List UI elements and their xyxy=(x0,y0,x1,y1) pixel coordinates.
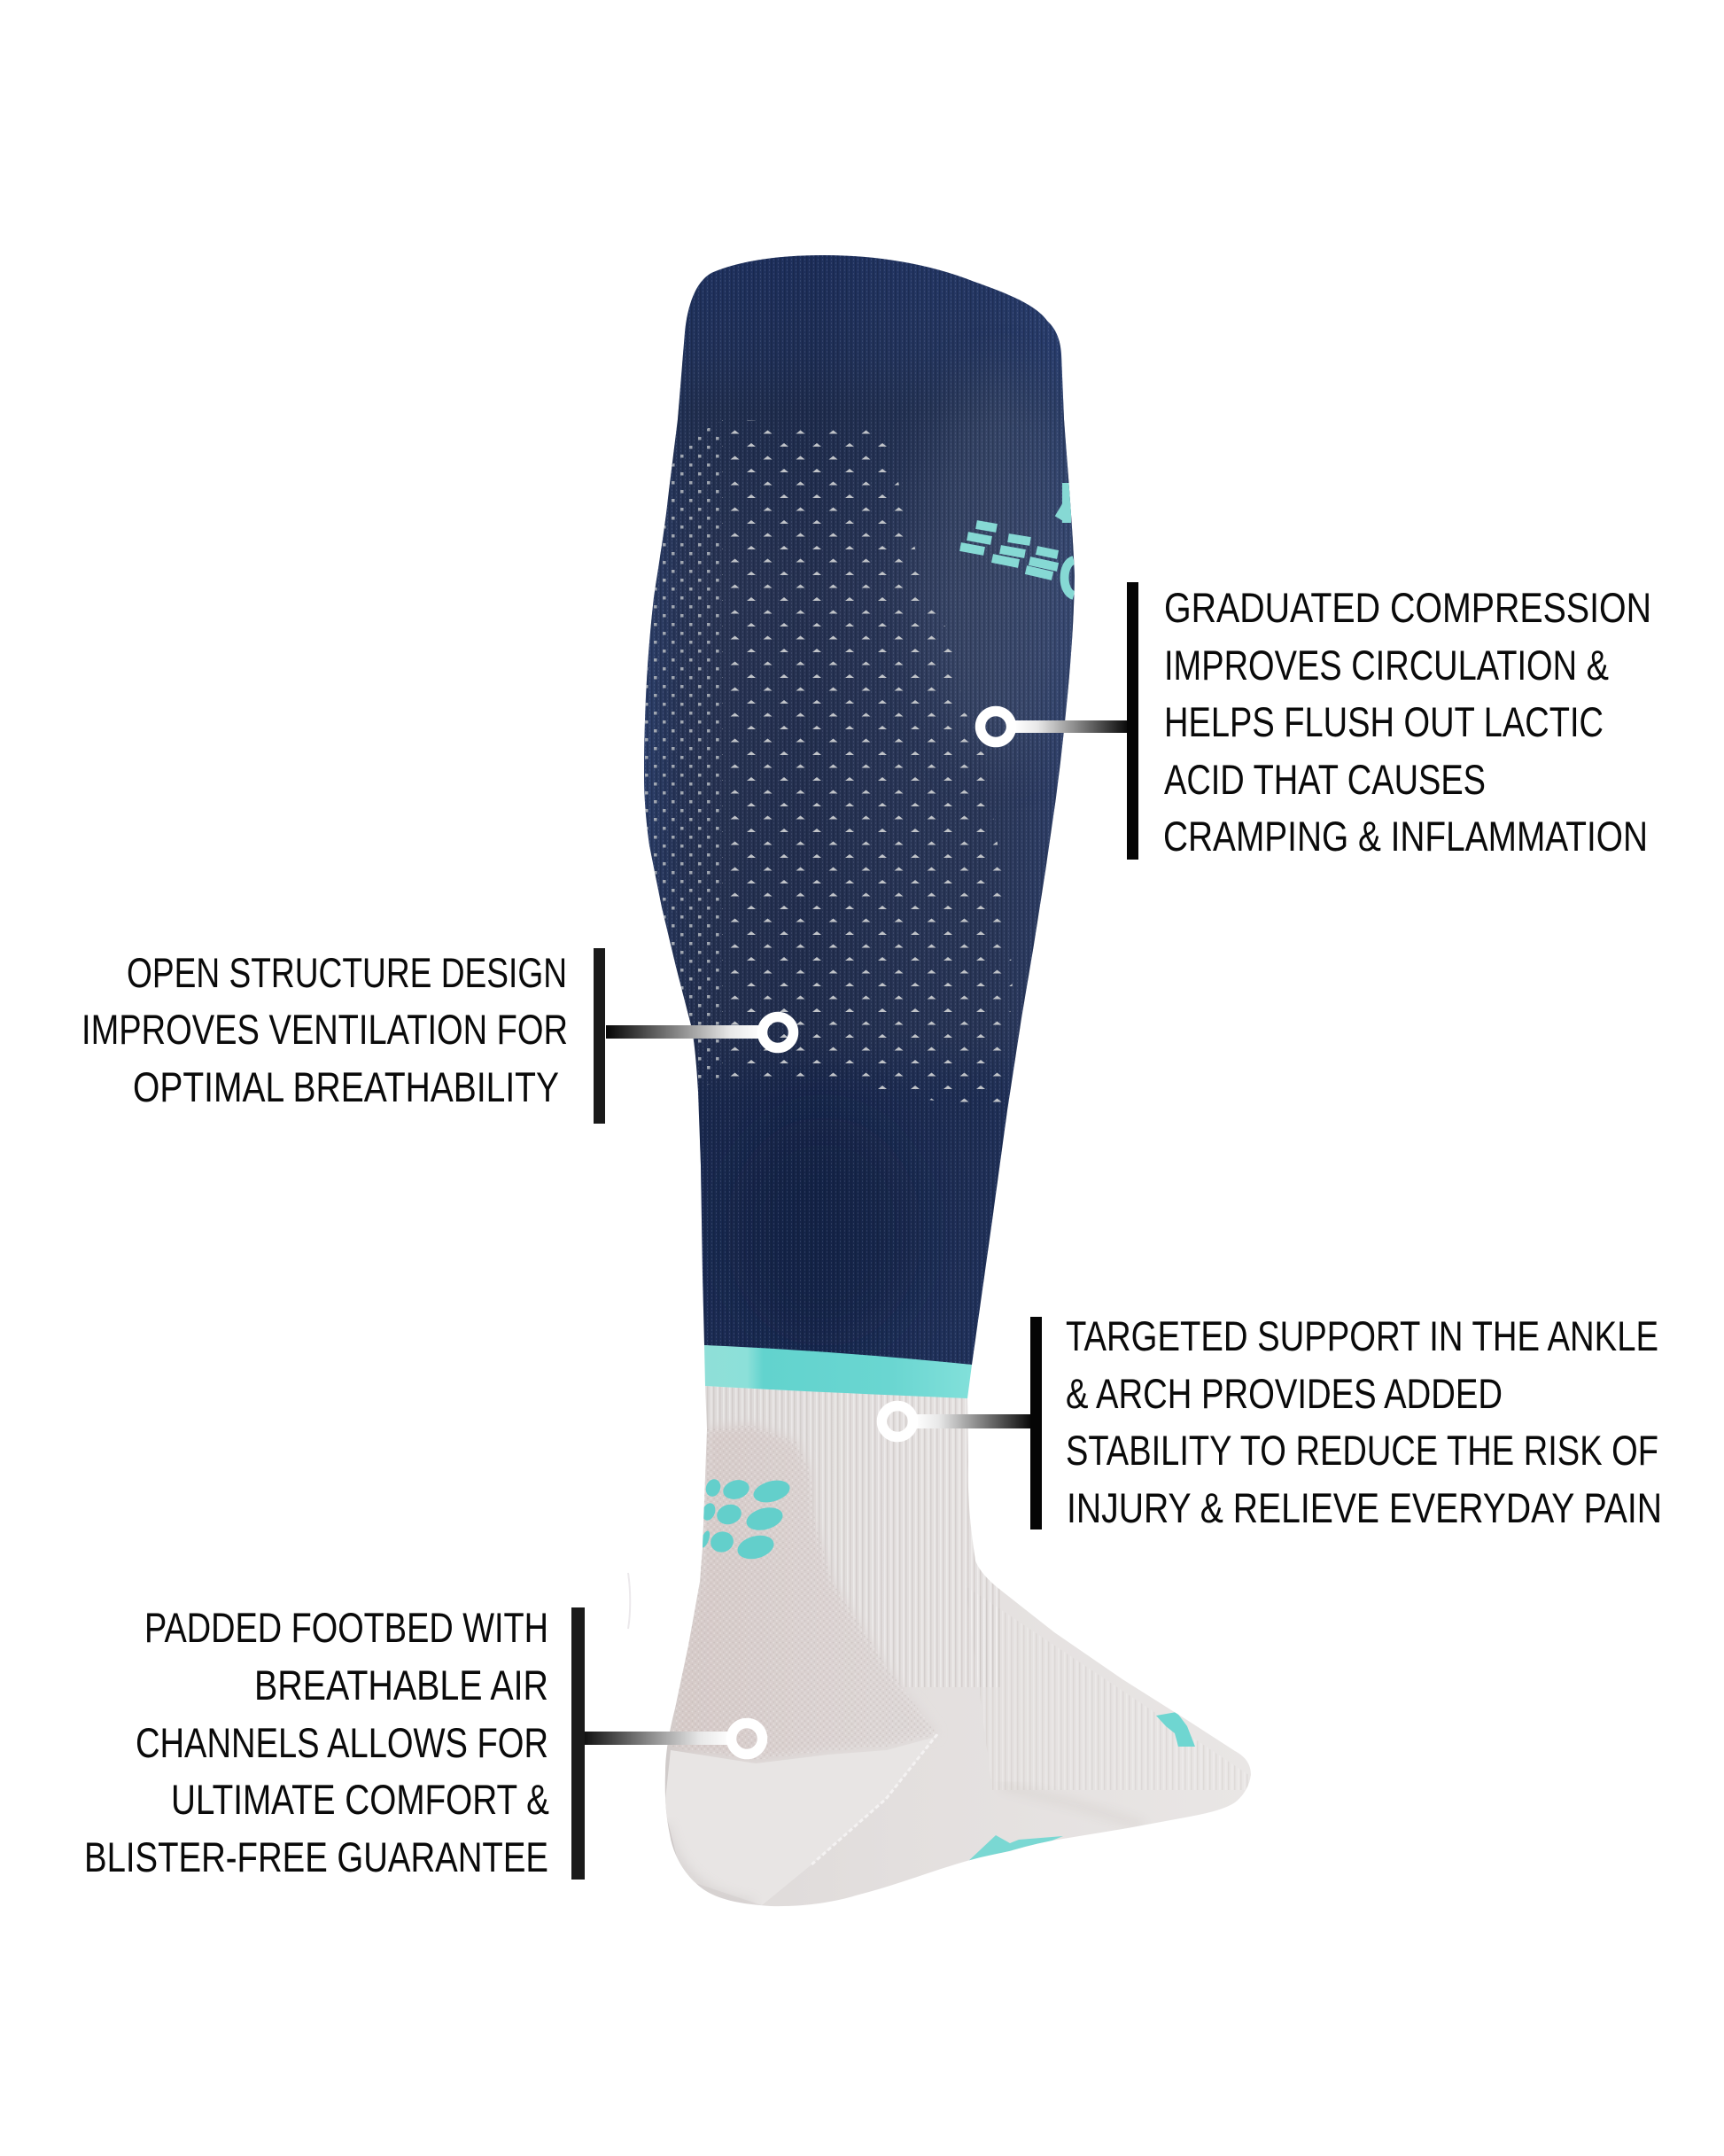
infographic: compression sock feature callouts xyxy=(85,255,1659,1907)
text block: OPEN STRUCTURE DESIGN xyxy=(127,949,567,996)
open structure ventilation dot zone xyxy=(642,420,1013,1110)
foot section: light gray sock xyxy=(660,1382,1258,1914)
sole seam xyxy=(811,1734,937,1865)
text block: HELPS FLUSH OUT LACTIC xyxy=(1164,698,1604,745)
callout: padded footbed xyxy=(84,1604,762,1880)
text block: CHANNELS ALLOWS FOR xyxy=(136,1719,548,1766)
sock illustration xyxy=(628,248,1258,1914)
text block: ACID THAT CAUSES xyxy=(1164,756,1486,803)
text block: & ARCH PROVIDES ADDED xyxy=(1066,1370,1503,1417)
ankle support logo dots xyxy=(703,1479,790,1560)
teal ankle band xyxy=(704,1345,972,1398)
toe logo mark xyxy=(1156,1712,1195,1747)
lower heel lighter panel xyxy=(664,1737,936,1905)
vertical bar xyxy=(1030,1317,1042,1529)
text block xyxy=(1066,1312,1662,1531)
connector line xyxy=(915,1414,1033,1428)
text block: IMPROVES VENTILATION FOR xyxy=(82,1006,568,1053)
callout: graduated compression xyxy=(980,582,1651,860)
text block: IMPROVES CIRCULATION & xyxy=(1164,642,1609,689)
text block xyxy=(1163,584,1651,860)
ring marker xyxy=(762,1017,794,1047)
callout: targeted support xyxy=(882,1312,1662,1531)
connector line xyxy=(578,1732,731,1745)
brand logo marks xyxy=(960,483,1074,595)
text block: ULTIMATE COMFORT & xyxy=(171,1776,549,1823)
text block xyxy=(82,949,568,1110)
connector line xyxy=(1014,720,1130,733)
sole logo mark xyxy=(969,1835,1063,1861)
vertical bar xyxy=(594,948,605,1124)
heel mesh panel xyxy=(671,1425,937,1760)
ring marker xyxy=(980,711,1012,743)
vertical bar xyxy=(571,1607,585,1880)
faint reflection sliver xyxy=(628,1573,630,1629)
connector line xyxy=(606,1025,762,1039)
ring marker xyxy=(882,1405,912,1437)
callout: open structure design xyxy=(82,948,794,1124)
text block: BLISTER-FREE GUARANTEE xyxy=(84,1833,548,1880)
text block: BREATHABLE AIR xyxy=(254,1662,548,1708)
text block: PADDED FOOTBED WITH xyxy=(144,1604,548,1651)
vertical bar xyxy=(1127,582,1138,860)
text block: OPTIMAL BREATHABILITY xyxy=(133,1063,559,1110)
ring marker xyxy=(732,1723,762,1755)
text block xyxy=(84,1604,549,1880)
calf section: navy compression fabric xyxy=(638,248,1081,1369)
